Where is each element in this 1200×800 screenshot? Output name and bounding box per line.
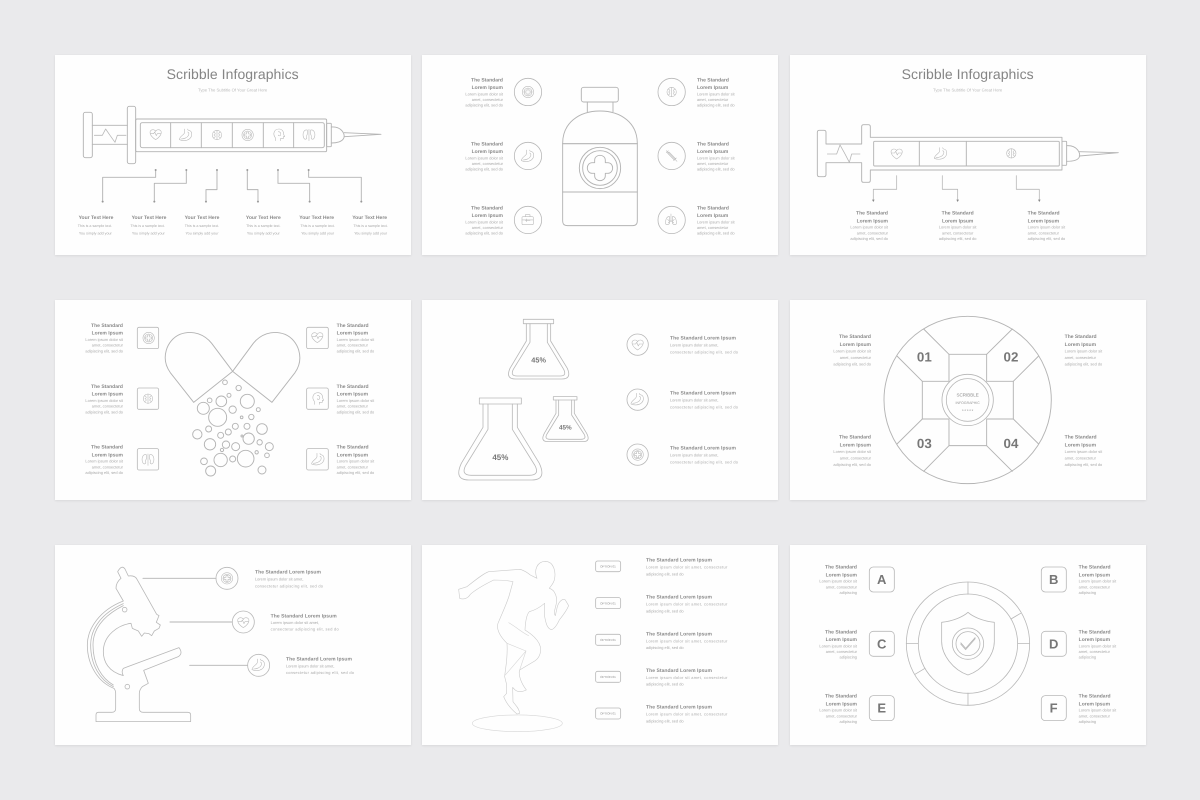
text columns: You simply add your: [186, 231, 219, 235]
right text blocks: The Standard: [697, 141, 729, 147]
left text blocks: amet, consectetur: [840, 456, 871, 461]
left text blocks: adipiscing elit, sed do: [85, 349, 123, 353]
right text blocks: amet, consectetur: [697, 161, 728, 166]
panel: four-part wheel: [790, 300, 1146, 500]
right text blocks: [1079, 564, 1116, 724]
panel: microscope: [55, 545, 411, 745]
left text blocks: The Standard: [839, 334, 871, 339]
text blocks: The Standard Lorem Ipsum: [646, 704, 712, 710]
text block 3: amet, consectetur: [1028, 231, 1059, 235]
text blocks: Lorem ipsum dolor sit amet,: [271, 620, 319, 625]
right text blocks: Lorem Ipsum: [1079, 637, 1110, 642]
right text blocks: Lorem Ipsum: [697, 149, 728, 154]
left text blocks: amet, consectetur: [472, 161, 503, 166]
text blocks: The Standard Lorem Ipsum: [255, 569, 321, 575]
left text blocks: adipiscing elit, sed do: [85, 410, 123, 414]
left text blocks: adipiscing elit, sed do: [465, 231, 503, 236]
right text blocks: Lorem Ipsum: [1065, 442, 1096, 448]
right text blocks: [337, 323, 374, 475]
left text blocks: Lorem Ipsum: [840, 342, 871, 347]
text blocks: [255, 569, 354, 675]
centre label: INFOGRAPHIC: [955, 401, 980, 405]
panel: three-step syringe: [790, 55, 1146, 255]
left text blocks: amet, consectetur: [92, 465, 123, 469]
bottle illustration: [563, 87, 637, 226]
left text blocks: adipiscing elit, sed do: [833, 362, 871, 367]
text blocks: Lorem ipsum dolor sit amet, consectetur: [646, 565, 727, 570]
right text blocks: amet, consectetur: [1065, 456, 1096, 461]
text block 2: The Standard: [942, 210, 974, 216]
text blocks: consectetur adipiscing elit, sed do: [271, 627, 339, 632]
icon circles: [627, 334, 648, 465]
right text blocks: Lorem Ipsum: [1065, 342, 1096, 347]
text block 3: [1028, 210, 1065, 241]
right text blocks: amet, consectetur: [337, 465, 368, 469]
text blocks: Lorem ipsum dolor sit amet, consectetur: [646, 712, 727, 717]
left text blocks: adipiscing: [840, 719, 857, 724]
left text blocks: The Standard: [91, 384, 123, 389]
right text blocks: The Standard: [1065, 334, 1097, 339]
text blocks: The Standard Lorem Ipsum: [670, 445, 736, 451]
step numbers: 02: [1004, 350, 1018, 365]
capsule halves: [165, 332, 300, 402]
left text blocks: Lorem ipsum dolor sit: [85, 459, 123, 464]
flask: small: 45%: [559, 424, 572, 431]
connector arrows: [872, 176, 1041, 202]
text blocks: Lorem ipsum dolor sit amet,: [670, 398, 718, 403]
left text blocks: [85, 323, 123, 475]
step numbers: 01: [917, 350, 932, 365]
right text blocks: adipiscing elit, sed do: [697, 103, 735, 108]
text blocks: adipiscing elit, sed do: [646, 572, 684, 576]
text block 2: [939, 210, 977, 241]
text block 1: amet, consectetur: [857, 231, 888, 235]
flask: small: [543, 397, 588, 442]
text columns: This is a sample text.: [246, 224, 281, 228]
left text blocks: Lorem ipsum dolor sit: [465, 156, 503, 160]
text blocks: consectetur adipiscing elit, sed do: [670, 350, 738, 354]
left text blocks: Lorem Ipsum: [472, 85, 503, 90]
icon circles: [514, 78, 685, 234]
right text blocks: amet, consectetur: [1065, 355, 1096, 360]
right text blocks: adipiscing: [1079, 719, 1096, 724]
step numbers: [917, 350, 1019, 451]
text columns: Your Text Here: [132, 215, 166, 220]
left text blocks: Lorem Ipsum: [826, 637, 857, 642]
text block 1: Lorem ipsum dolor sit: [850, 225, 888, 230]
left text blocks: amet, consectetur: [826, 649, 857, 654]
right text blocks: amet, consectetur: [697, 225, 728, 230]
right text blocks: Lorem ipsum dolor sit: [337, 337, 374, 342]
text columns: Your Text Here: [299, 215, 334, 220]
option buttons: OPTION 01: [600, 565, 616, 568]
right text blocks: Lorem ipsum dolor sit: [1079, 644, 1116, 648]
right text blocks: Lorem ipsum dolor sit: [1065, 349, 1102, 354]
flask: large: 45%: [492, 453, 508, 462]
right text blocks: adipiscing elit, sed do: [697, 231, 735, 236]
left text blocks: adipiscing elit, sed do: [833, 462, 871, 467]
text blocks: consectetur adipiscing elit, sed do: [255, 584, 323, 588]
right text blocks: amet, consectetur: [697, 97, 728, 102]
right text blocks: adipiscing elit, sed do: [1065, 362, 1102, 367]
wheel diagram: [884, 316, 1051, 484]
left text blocks: The Standard: [839, 434, 871, 440]
left text blocks: amet, consectetur: [840, 355, 871, 360]
panel: medicine bottle: [422, 55, 778, 255]
text block 3: adipiscing elit, sed do: [1028, 236, 1065, 241]
letter tiles: A: [877, 573, 886, 587]
text block 2: adipiscing elit, sed do: [939, 236, 977, 241]
text blocks: Lorem ipsum dolor sit amet, consectetur: [646, 639, 727, 643]
left text blocks: Lorem ipsum dolor sit: [833, 349, 871, 354]
text blocks: Lorem ipsum dolor sit amet, consectetur: [646, 675, 727, 680]
right text blocks: adipiscing: [1079, 655, 1096, 660]
right text blocks: Lorem ipsum dolor sit: [1065, 449, 1102, 454]
text columns: Your Text Here: [352, 215, 387, 220]
left text blocks: Lorem Ipsum: [840, 442, 871, 448]
text blocks: [646, 557, 727, 723]
text columns: You simply add your: [132, 231, 165, 235]
text blocks: [670, 335, 738, 464]
left text blocks: Lorem ipsum dolor sit: [819, 644, 857, 648]
left text blocks: adipiscing: [840, 590, 857, 595]
text block 3: Lorem Ipsum: [1028, 218, 1059, 224]
subtitle: Type The Subtitle Of Your Great Here: [198, 88, 267, 92]
text blocks: adipiscing elit, sed do: [646, 719, 684, 723]
letter tiles: E: [877, 701, 886, 716]
left text blocks: Lorem ipsum dolor sit: [819, 579, 857, 584]
text block 2: Lorem ipsum dolor sit: [939, 225, 977, 230]
right text blocks: The Standard: [337, 384, 369, 389]
panel: flasks: [422, 300, 778, 500]
right text blocks: The Standard: [1079, 629, 1111, 635]
syringe illustration: [83, 106, 381, 164]
letter tiles: F: [1050, 701, 1058, 716]
right text blocks: The Standard: [1079, 693, 1111, 699]
right text blocks: amet, consectetur: [1079, 585, 1110, 589]
right text blocks: Lorem Ipsum: [1079, 701, 1110, 707]
text blocks: adipiscing elit, sed do: [646, 645, 684, 650]
left text blocks: Lorem Ipsum: [92, 391, 123, 397]
text columns: You simply add your: [247, 231, 280, 235]
text blocks: The Standard Lorem Ipsum: [646, 594, 712, 600]
text columns: You simply add your: [79, 231, 112, 235]
panel: six-step syringe: [55, 55, 411, 255]
icon circles: [216, 567, 270, 676]
text block 1: [850, 210, 888, 241]
right text blocks: Lorem ipsum dolor sit: [697, 156, 735, 160]
panel: runner: [422, 545, 778, 745]
letter tiles: [869, 567, 1066, 721]
left text blocks: Lorem Ipsum: [826, 701, 857, 707]
text blocks: The Standard Lorem Ipsum: [646, 557, 712, 563]
subtitle: Type The Subtitle Of Your Great Here: [933, 88, 1002, 92]
text blocks: consectetur adipiscing elit, sed do: [670, 405, 738, 409]
text blocks: The Standard Lorem Ipsum: [286, 656, 352, 662]
option buttons: OPTION 01: [600, 675, 616, 679]
letter tiles: C: [877, 637, 886, 651]
option buttons: OPTION 01: [600, 602, 616, 605]
letter tiles: B: [1049, 573, 1058, 587]
text columns: [78, 215, 388, 235]
left text blocks: The Standard: [825, 564, 857, 570]
granules: [193, 380, 273, 476]
right text blocks: Lorem Ipsum: [337, 391, 368, 397]
right text blocks: The Standard: [337, 323, 369, 328]
centre label: [955, 392, 980, 412]
left text blocks: Lorem ipsum dolor sit: [819, 708, 857, 713]
right text blocks: Lorem Ipsum: [1079, 572, 1110, 578]
left text blocks: [819, 564, 857, 724]
text blocks: The Standard Lorem Ipsum: [670, 390, 736, 396]
option buttons: [596, 561, 621, 719]
right text blocks: adipiscing: [1079, 590, 1096, 595]
right text blocks: [697, 77, 735, 236]
text columns: This is a sample text.: [78, 224, 112, 228]
left text blocks: The Standard: [471, 141, 503, 147]
text blocks: adipiscing elit, sed do: [646, 609, 684, 613]
right text blocks: amet, consectetur: [1079, 649, 1110, 654]
left text blocks: The Standard: [471, 205, 503, 211]
text block 3: The Standard: [1028, 210, 1060, 216]
right text blocks: adipiscing elit, sed do: [337, 349, 374, 353]
left text blocks: Lorem Ipsum: [92, 452, 123, 458]
syringe illustration: [817, 125, 1118, 182]
panel: open capsule: [55, 300, 411, 500]
flask: top: [509, 319, 569, 379]
text columns: Your Text Here: [185, 215, 219, 220]
step numbers: 04: [1004, 436, 1019, 451]
centre label: ★★★★★: [962, 409, 974, 412]
right text blocks: The Standard: [1065, 434, 1097, 440]
text blocks: The Standard Lorem Ipsum: [670, 335, 736, 341]
left text blocks: adipiscing elit, sed do: [85, 470, 123, 475]
pointer lines: [143, 578, 248, 665]
right text blocks: The Standard: [697, 205, 729, 211]
centre label: SCRIBBLE: [957, 392, 979, 397]
text blocks: The Standard Lorem Ipsum: [271, 613, 337, 619]
left text blocks: amet, consectetur: [826, 714, 857, 718]
right text blocks: Lorem Ipsum: [337, 330, 368, 336]
right text blocks: Lorem ipsum dolor sit: [337, 398, 374, 403]
step numbers: 03: [917, 436, 932, 451]
right text blocks: adipiscing elit, sed do: [697, 167, 735, 172]
text columns: Your Text Here: [246, 215, 281, 220]
connector lines: [102, 169, 362, 203]
left text blocks: amet, consectetur: [472, 225, 503, 230]
left text blocks: The Standard: [91, 444, 123, 450]
left text blocks: The Standard: [825, 629, 857, 635]
left text blocks: [833, 334, 871, 467]
right text blocks: amet, consectetur: [337, 343, 368, 348]
text columns: This is a sample text.: [353, 224, 388, 228]
right text blocks: Lorem Ipsum: [337, 452, 368, 458]
icon squares: [137, 327, 328, 470]
left text blocks: Lorem ipsum dolor sit: [85, 337, 123, 342]
text columns: Your Text Here: [79, 215, 113, 220]
text blocks: Lorem ipsum dolor sit amet,: [255, 577, 303, 582]
panel: shield wheel: [790, 545, 1146, 745]
text blocks: adipiscing elit, sed do: [646, 682, 684, 687]
left text blocks: Lorem Ipsum: [826, 572, 857, 578]
flask: large: [459, 398, 542, 480]
option buttons: OPTION 01: [600, 638, 616, 642]
right text blocks: Lorem ipsum dolor sit: [697, 220, 735, 224]
text blocks: The Standard Lorem Ipsum: [646, 668, 712, 673]
right text blocks: adipiscing elit, sed do: [337, 410, 374, 414]
right text blocks: The Standard: [697, 77, 729, 83]
text blocks: Lorem ipsum dolor sit amet,: [670, 453, 718, 458]
text block 1: adipiscing elit, sed do: [850, 236, 888, 241]
right text blocks: Lorem Ipsum: [697, 213, 728, 218]
option buttons: OPTION 01: [600, 712, 616, 715]
text blocks: Lorem ipsum dolor sit amet, consectetur: [646, 602, 727, 607]
right text blocks: Lorem ipsum dolor sit: [1079, 708, 1116, 713]
runner illustration: [459, 561, 569, 732]
text columns: This is a sample text.: [130, 224, 165, 228]
left text blocks: adipiscing: [840, 655, 857, 660]
right text blocks: Lorem ipsum dolor sit: [1079, 579, 1116, 584]
text blocks: consectetur adipiscing elit, sed do: [286, 670, 354, 675]
title: Scribble Infographics: [167, 66, 299, 82]
left text blocks: Lorem Ipsum: [472, 149, 503, 154]
text columns: This is a sample text.: [185, 224, 219, 228]
left text blocks: Lorem Ipsum: [92, 330, 123, 336]
right text blocks: adipiscing elit, sed do: [1065, 462, 1102, 467]
text blocks: Lorem ipsum dolor sit amet,: [286, 664, 334, 668]
text blocks: The Standard Lorem Ipsum: [646, 631, 712, 637]
title: Scribble Infographics: [902, 66, 1034, 82]
microscope illustration: [87, 567, 191, 722]
text block 3: Lorem ipsum dolor sit: [1028, 225, 1065, 230]
left text blocks: The Standard: [471, 77, 503, 83]
right text blocks: Lorem ipsum dolor sit: [697, 92, 735, 96]
left text blocks: The Standard: [825, 693, 857, 699]
right text blocks: [1065, 334, 1102, 467]
text block 1: Lorem Ipsum: [857, 218, 888, 224]
text block 2: Lorem Ipsum: [942, 218, 973, 224]
left text blocks: [465, 77, 503, 236]
right text blocks: The Standard: [337, 444, 369, 450]
text columns: You simply add your: [301, 231, 334, 235]
text blocks: Lorem ipsum dolor sit amet,: [670, 343, 718, 348]
left text blocks: amet, consectetur: [92, 404, 123, 409]
left text blocks: Lorem Ipsum: [472, 213, 503, 218]
right text blocks: Lorem ipsum dolor sit: [337, 459, 374, 464]
letter tiles: D: [1049, 637, 1058, 651]
text block 1: The Standard: [856, 210, 888, 216]
left text blocks: Lorem ipsum dolor sit: [465, 220, 503, 224]
left text blocks: adipiscing elit, sed do: [465, 103, 503, 108]
right text blocks: The Standard: [1079, 564, 1111, 570]
left text blocks: amet, consectetur: [92, 343, 123, 348]
ring diagram with shield: [906, 582, 1030, 705]
left text blocks: Lorem ipsum dolor sit: [465, 92, 503, 96]
right text blocks: amet, consectetur: [1079, 714, 1110, 718]
left text blocks: Lorem ipsum dolor sit: [85, 398, 123, 403]
left text blocks: amet, consectetur: [472, 97, 503, 102]
left text blocks: Lorem ipsum dolor sit: [833, 449, 871, 454]
left text blocks: adipiscing elit, sed do: [465, 167, 503, 172]
text columns: You simply add your: [354, 231, 387, 235]
right text blocks: amet, consectetur: [337, 404, 368, 409]
text columns: This is a sample text.: [300, 224, 335, 228]
left text blocks: The Standard: [91, 323, 123, 328]
left text blocks: amet, consectetur: [826, 585, 857, 589]
flask: top: 45%: [531, 356, 546, 364]
text block 2: amet, consectetur: [942, 231, 973, 235]
text blocks: consectetur adipiscing elit, sed do: [670, 460, 738, 464]
right text blocks: adipiscing elit, sed do: [337, 470, 374, 475]
right text blocks: Lorem Ipsum: [697, 85, 728, 90]
